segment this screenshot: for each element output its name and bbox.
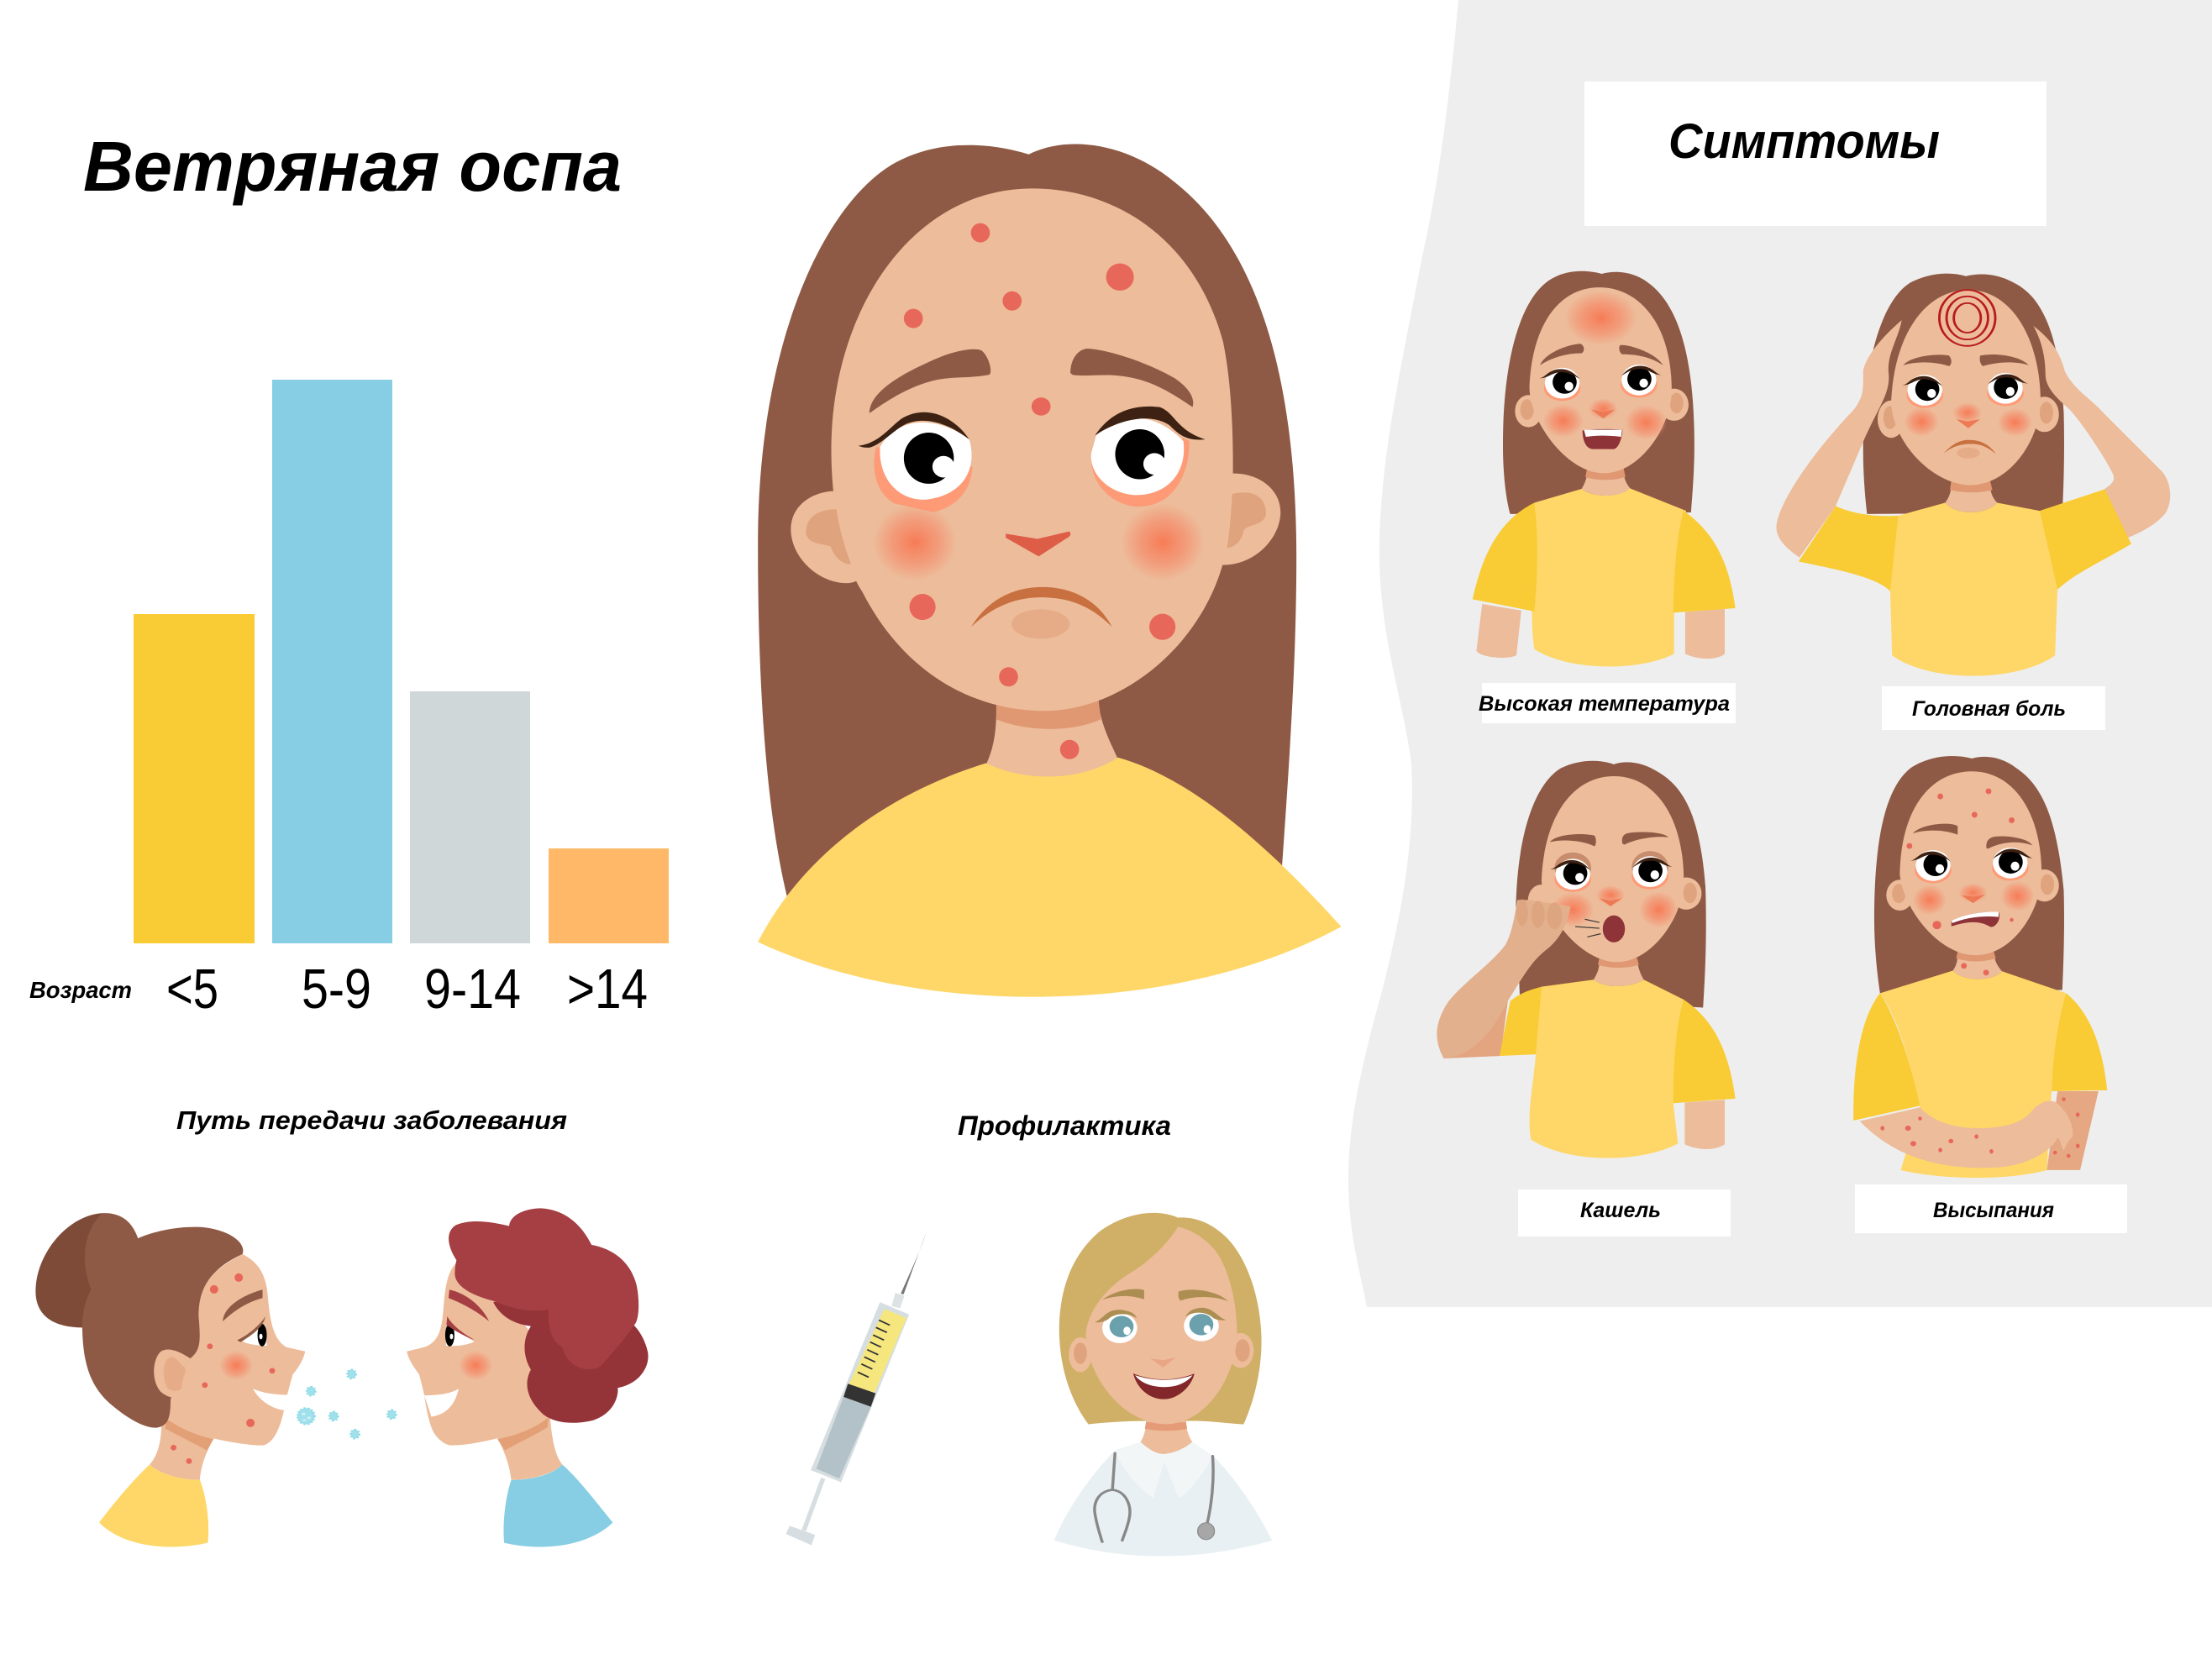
symptom: rash	[1853, 756, 2107, 1178]
healthy person	[407, 1208, 649, 1547]
axis label: age: Возраст	[29, 977, 132, 1003]
symptom label: high temperature	[1479, 683, 1736, 723]
symptom label: rash: Высыпания	[1933, 1199, 2054, 1222]
bar: over 14	[549, 848, 669, 943]
tick label: under 5: <5	[166, 958, 218, 1021]
panel: symptoms background	[1348, 0, 2212, 1307]
title: Ветряная оспа	[83, 127, 622, 206]
sick person	[35, 1213, 305, 1547]
symptoms heading	[1584, 81, 2046, 226]
bar chart: age distribution	[29, 380, 669, 1021]
bar: under 5	[134, 614, 255, 943]
virus droplets	[297, 1369, 396, 1439]
symptom: cough	[1437, 761, 1736, 1158]
tick label: over 14: >14	[567, 958, 648, 1021]
symptom label: headache: Головная боль	[1912, 697, 2066, 721]
icon: vaccine syringe	[786, 1232, 927, 1546]
symptoms heading: Симптомы	[1668, 114, 1940, 169]
main illustration: girl with chickenpox	[758, 144, 1341, 997]
bar: 9-14	[410, 691, 530, 943]
heading: prevention: Профилактика	[958, 1111, 1171, 1141]
symptom: headache	[1776, 274, 2170, 676]
symptom label: rash	[1855, 1184, 2127, 1233]
symptom label: high temperature: Высокая температура	[1479, 692, 1730, 716]
bar: 5-9	[272, 380, 392, 943]
symptom: fever	[1473, 271, 1736, 667]
illustration: airborne transmission	[35, 1208, 649, 1547]
heading: transmission: Путь передачи заболевания	[176, 1105, 567, 1135]
symptom label: cough	[1518, 1189, 1731, 1237]
symptom label: cough: Кашель	[1580, 1199, 1661, 1222]
tick label: 9-14: 9-14	[424, 958, 521, 1021]
illustration: doctor	[1054, 1213, 1272, 1557]
tick label: 5-9: 5-9	[302, 958, 371, 1021]
symptom label: headache	[1882, 686, 2105, 730]
